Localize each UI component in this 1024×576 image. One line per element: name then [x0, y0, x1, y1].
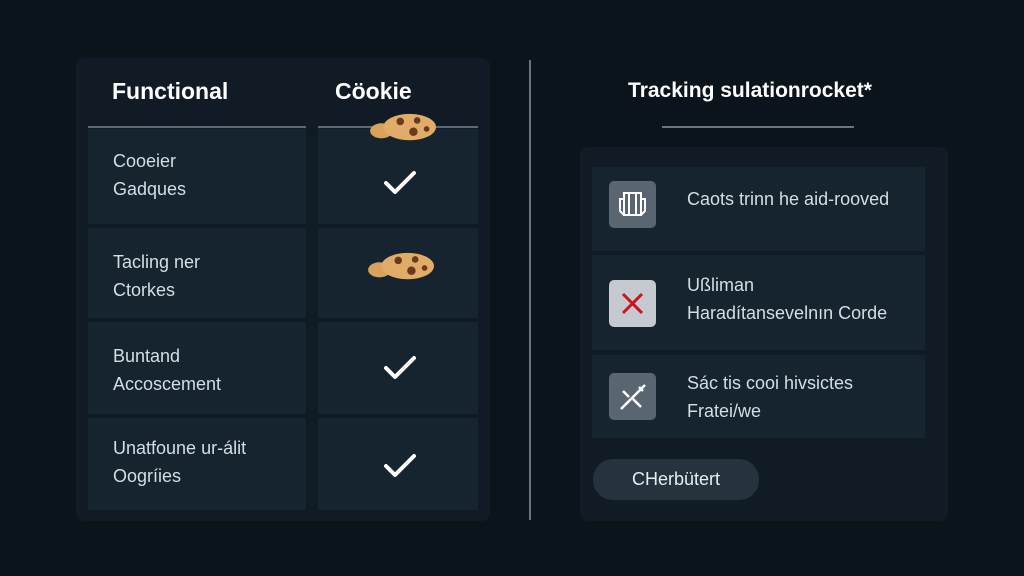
divider — [529, 60, 531, 520]
icon: cookie header — [370, 114, 436, 140]
panel: left table — [76, 58, 490, 521]
row 3 — [88, 322, 306, 414]
row 4 — [88, 418, 306, 510]
row 3: Buntand — [113, 346, 180, 366]
item 3: Sác tis cooi hivsictes — [687, 373, 853, 393]
icon: tools — [609, 373, 656, 420]
item 3: Fratei/we — [687, 401, 761, 421]
row 3: Accoscement — [113, 374, 221, 394]
item 3 — [592, 355, 925, 438]
button — [593, 459, 759, 500]
row 4: Unatfoune ur-álit — [113, 438, 246, 458]
item 1 — [592, 167, 925, 251]
title: right: Tracking sulationrocket* — [628, 79, 872, 102]
icon: red x — [609, 280, 656, 327]
item 2: Ußliman — [687, 275, 754, 295]
panel: right list — [580, 147, 948, 521]
icon: box — [609, 181, 656, 228]
row 1: Cooeier — [113, 151, 176, 171]
item 2: Haradítansevelnın Corde — [687, 303, 887, 323]
row 2 — [88, 228, 306, 318]
row 1: Gadques — [113, 179, 186, 199]
heading: Functional: Functional — [112, 78, 228, 104]
button: CHerbütert — [632, 469, 720, 489]
row 2: Ctorkes — [113, 280, 175, 300]
item 2 — [592, 255, 925, 350]
item 1: Caots trinn he aid-rooved — [687, 189, 889, 209]
row 4: Oogríies — [113, 466, 181, 486]
row 1 — [88, 129, 306, 224]
heading: Cookie: Cöokie — [335, 78, 412, 104]
row 2: Tacling ner — [113, 252, 200, 272]
icon: cookie row 2 — [368, 252, 434, 280]
